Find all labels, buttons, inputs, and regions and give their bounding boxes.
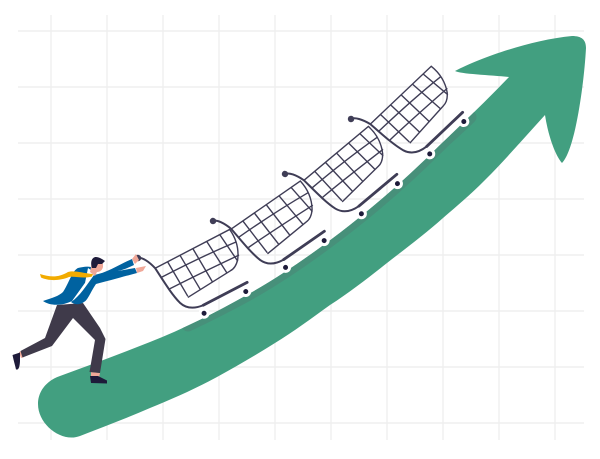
back shoe (12, 352, 20, 370)
trousers (20, 303, 106, 373)
jacket front and arms (71, 259, 137, 304)
head (90, 261, 103, 276)
hands (132, 254, 146, 273)
cart 3 (280, 111, 412, 241)
businessman pushing carts (12, 254, 146, 384)
flying necktie (40, 271, 93, 280)
hair (91, 257, 105, 268)
cart 2 (209, 164, 340, 293)
jacket back (43, 267, 92, 305)
cart frame (138, 218, 247, 322)
cart 1 (134, 211, 261, 335)
ankles (19, 351, 100, 378)
wheels (197, 284, 253, 321)
cart 4 (346, 51, 478, 183)
shirt (71, 268, 95, 303)
arrow shadow under carts (188, 117, 470, 325)
front shoe (90, 376, 107, 384)
handle (134, 254, 142, 262)
basket grid (155, 229, 249, 305)
growth arrow (38, 36, 586, 438)
rail (203, 282, 247, 305)
